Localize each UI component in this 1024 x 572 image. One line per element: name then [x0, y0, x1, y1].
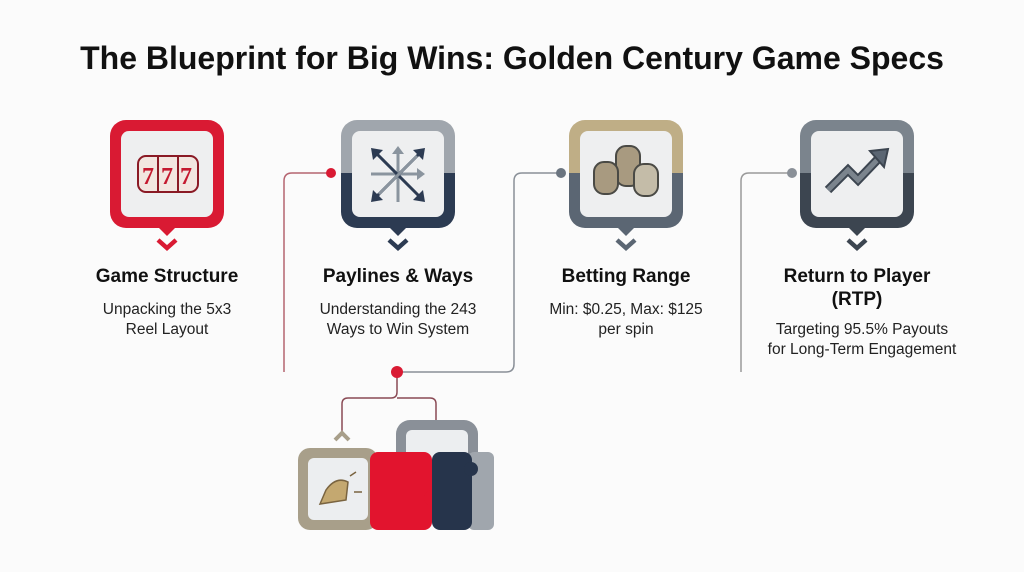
heading 2: Paylines & Ways — [323, 266, 473, 287]
chevron up — [334, 430, 350, 442]
text 1 — [103, 301, 231, 338]
chevron 1 — [156, 228, 178, 251]
chevron 3 — [616, 228, 636, 251]
navy piece — [432, 452, 472, 530]
card: game structure — [110, 120, 224, 228]
icon: arrows — [371, 146, 425, 202]
text 3: per spin — [598, 321, 654, 338]
chevron 4 — [846, 228, 868, 251]
icon: trend arrow — [824, 148, 890, 194]
text 1: Reel Layout — [126, 321, 208, 338]
text 3 — [549, 301, 703, 338]
card: betting — [569, 120, 683, 228]
heading 1: Game Structure — [96, 266, 238, 287]
title: The Blueprint for Big Wins: Golden Century Game Specs — [80, 40, 944, 76]
icon: coins — [593, 145, 659, 197]
heading 4: Return to Player — [784, 266, 930, 287]
icon: 777 reels: 7 — [142, 164, 154, 190]
text 3: Min: $0.25, Max: $125 — [549, 301, 703, 318]
heading 4 — [784, 266, 930, 310]
text 2 — [320, 301, 476, 338]
icon: hat — [318, 471, 362, 505]
text 4 — [768, 321, 956, 358]
puzzle illustration — [298, 420, 494, 530]
text 4: for Long-Term Engagement — [768, 341, 956, 358]
text 1: Unpacking the 5x3 — [103, 301, 231, 318]
red piece — [370, 452, 432, 530]
icon: 777 reels — [137, 155, 199, 193]
heading 4: (RTP) — [832, 289, 882, 310]
heading 3: Betting Range — [562, 266, 690, 287]
gray frame — [396, 420, 478, 500]
card: paylines — [341, 120, 455, 228]
text 2: Understanding the 243 — [320, 301, 476, 318]
icon: 777 reels: 7 — [161, 164, 173, 190]
icon: 777 reels: 7 — [180, 164, 192, 190]
tan frame — [298, 448, 378, 530]
chevron 2 — [388, 228, 408, 251]
gray piece — [468, 452, 494, 530]
card: RTP — [800, 120, 914, 228]
text 4: Targeting 95.5% Payouts — [776, 321, 948, 338]
text 2: Ways to Win System — [327, 321, 469, 338]
